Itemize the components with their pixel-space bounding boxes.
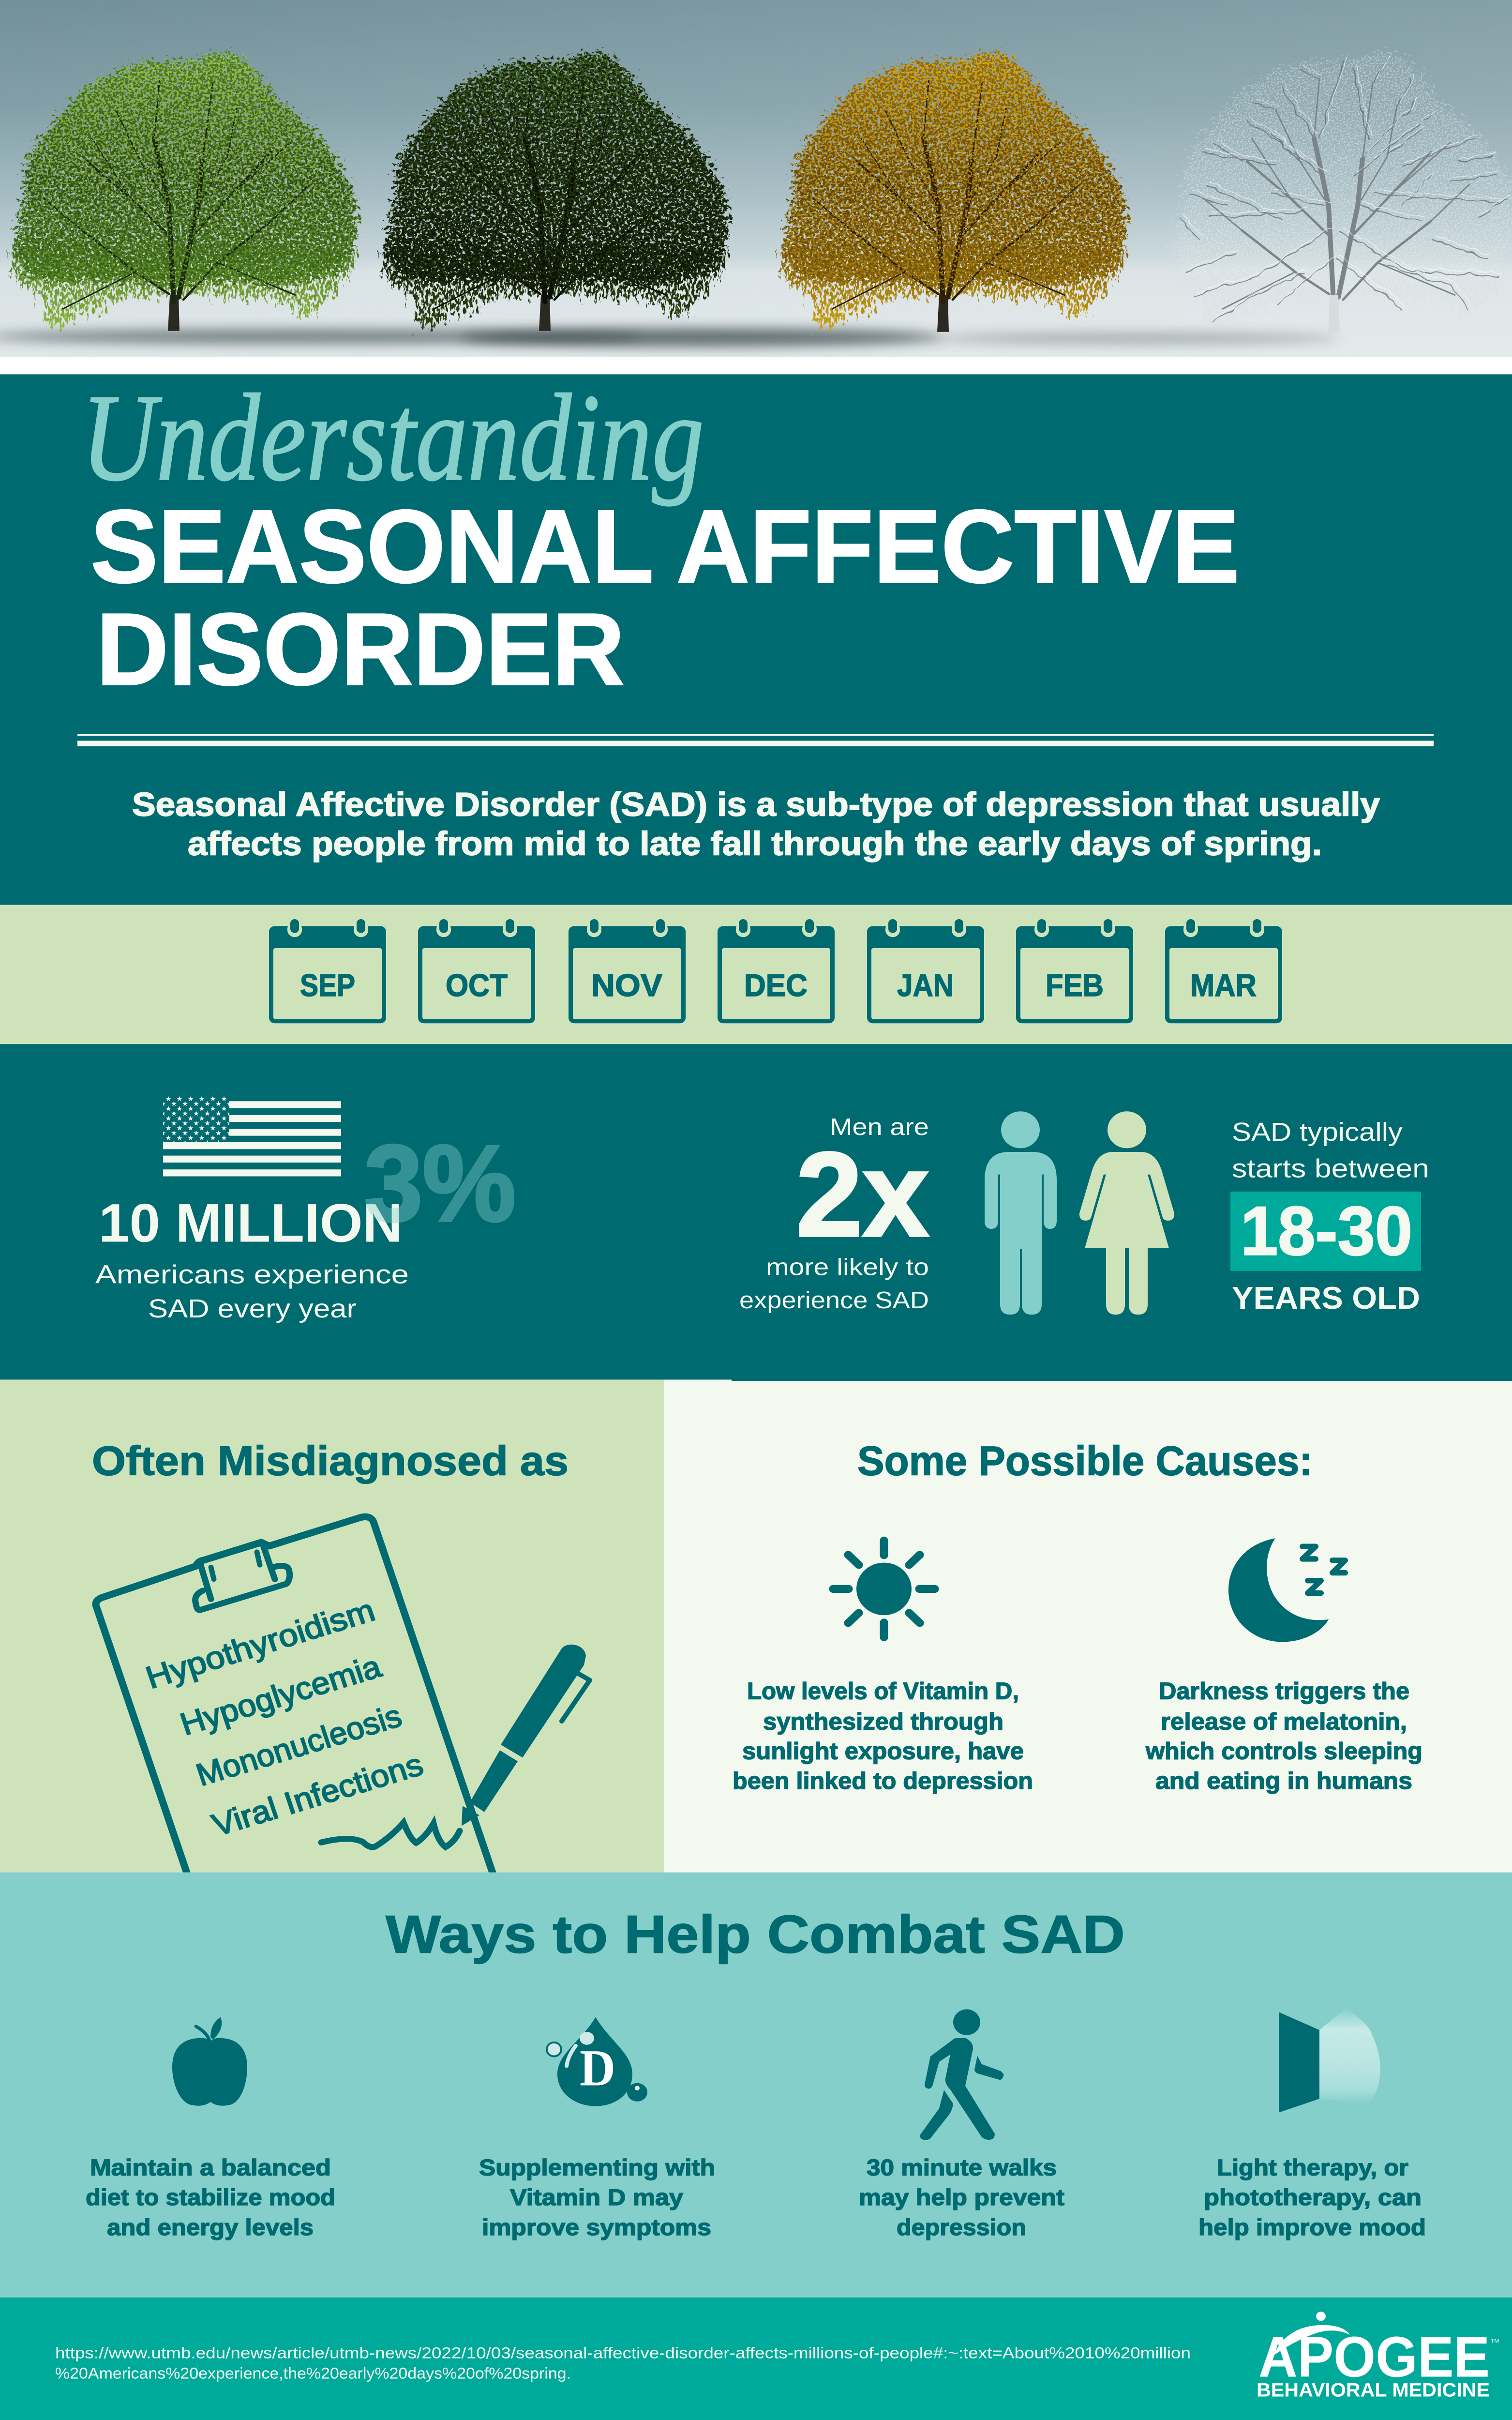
logo: Apogee Behavioral Medicine: APOGEE	[1258, 2325, 1490, 2389]
icon: sun	[833, 1541, 935, 1637]
text: vitamin D cause: been linked to depression	[733, 1767, 1033, 1794]
text: walks: 30 minute walks	[867, 2155, 1057, 2180]
icon: apple	[172, 2017, 247, 2106]
text: darkness cause: Darkness triggers the	[1159, 1678, 1409, 1704]
icon: vitamin D drop: D	[580, 2040, 615, 2097]
tree: spring green	[11, 52, 357, 333]
calendar: OCT: OCT	[446, 968, 508, 1003]
text: SAD typically starts: SAD typically	[1232, 1117, 1403, 1147]
text: vitamin D supplement	[479, 2155, 715, 2240]
tree: autumn gold	[780, 52, 1126, 333]
calendar: MAR	[1165, 919, 1282, 1023]
tree: summer dark green	[382, 52, 728, 333]
calendar: DEC	[718, 919, 835, 1023]
text: diagnoses list: Hypoglycemia	[176, 1649, 386, 1742]
text: men are 2x more likely	[739, 1113, 929, 1314]
panel: footer	[0, 2298, 1512, 2420]
calendar: NOV: NOV	[591, 968, 662, 1003]
calendar: JAN: JAN	[897, 968, 954, 1003]
calendar: NOV	[569, 919, 686, 1023]
text: Americans experience SAD	[95, 1260, 409, 1323]
icon: signature squiggle	[321, 1823, 460, 1847]
text: darkness cause: which controls sleeping	[1145, 1737, 1422, 1764]
text: men are 2x more likely: Men are	[830, 1113, 929, 1140]
text: walks: depression	[897, 2215, 1026, 2240]
text: walks: may help prevent	[859, 2185, 1064, 2210]
script word: Understanding: Understanding	[81, 369, 704, 507]
text: men are 2x more likely: 2x	[796, 1127, 929, 1261]
text: light therapy: Light therapy, or	[1217, 2155, 1408, 2180]
icon: man	[985, 1111, 1057, 1315]
text: SAD typically starts	[1232, 1117, 1429, 1183]
text: men are 2x more likely: more likely to	[766, 1253, 929, 1280]
heading line 2: DISORDER	[96, 592, 625, 706]
text: vitamin D supplement: improve symptoms	[482, 2215, 711, 2240]
icon: walking person	[920, 2009, 1003, 2140]
text: vitamin D cause: Low levels of Vitamin D,	[747, 1678, 1019, 1704]
stat: 10 million: 10 MILLION	[99, 1193, 403, 1254]
icon: woman	[1079, 1111, 1174, 1315]
text: source URL	[55, 2344, 1191, 2382]
icon: pen	[462, 1645, 590, 1826]
heading: Ways to Help Combat SAD	[386, 1905, 1125, 1965]
text: light therapy: help improve mood	[1198, 2215, 1426, 2240]
panel: often misdiagnosed as	[0, 1379, 664, 1878]
text: darkness cause: release of melatonin,	[1161, 1708, 1407, 1735]
text: Americans experience SAD: SAD every year	[148, 1294, 357, 1323]
callout: 18-30: 18-30	[1241, 1193, 1412, 1270]
calendar: SEP: SEP	[300, 968, 355, 1003]
calendar: FEB: FEB	[1046, 968, 1104, 1003]
text: diagnoses list: Viral Infections	[208, 1747, 427, 1843]
photo: four seasonal trees	[0, 0, 1512, 357]
title	[81, 369, 1240, 706]
intro text: Seasonal Affective Disorder (SAD) is a sub-type of depression that usually	[132, 786, 1380, 823]
text: light therapy	[1198, 2155, 1426, 2240]
text: vitamin D supplement: Vitamin D may	[510, 2185, 683, 2210]
text: vitamin D cause: synthesized through	[763, 1708, 1003, 1735]
panel: ways to help combat SAD	[0, 1873, 1512, 2298]
text: balanced diet: Maintain a balanced	[90, 2155, 331, 2180]
logo: Apogee Behavioral Medicine	[1257, 2312, 1499, 2401]
icon: US flag	[163, 1096, 341, 1176]
logo: Apogee Behavioral Medicine: TM	[1491, 2338, 1499, 2344]
text: diagnoses list: Hypothyroidism	[141, 1593, 379, 1695]
logo: Apogee Behavioral Medicine: BEHAVIORAL MEDICINE	[1257, 2379, 1490, 2401]
calendar: OCT	[418, 919, 535, 1023]
calendar: MAR: MAR	[1190, 968, 1257, 1003]
calendar: DEC: DEC	[744, 968, 808, 1003]
heading: Often Misdiagnosed as	[92, 1437, 569, 1484]
text: source URL: %20Americans%20experience,the%20early%20days%20of%20spring.	[55, 2365, 571, 2382]
calendar: FEB	[1016, 919, 1133, 1023]
text: darkness cause	[1145, 1678, 1422, 1794]
icon: light therapy lamp	[1279, 2009, 1380, 2113]
text: walks	[859, 2155, 1064, 2240]
calendar: SEP	[269, 919, 386, 1023]
text: vitamin D cause	[733, 1678, 1033, 1794]
text: SAD typically starts: starts between	[1232, 1154, 1429, 1183]
text: vitamin D supplement: Supplementing with	[479, 2155, 715, 2180]
text: Americans experience SAD: Americans experience	[95, 1260, 409, 1289]
text: years old: YEARS OLD	[1232, 1281, 1420, 1316]
text: men are 2x more likely: experience SAD	[739, 1286, 929, 1314]
panel: months calendar band	[0, 905, 1512, 1044]
calendar: JAN	[867, 919, 984, 1023]
icon: moon with z's	[1228, 1538, 1345, 1642]
intro text	[132, 786, 1380, 862]
icon: vitamin D drop	[547, 2017, 647, 2106]
heading line 1: SEASONAL AFFECTIVE	[90, 488, 1240, 605]
icon: clipboard	[96, 1517, 494, 1878]
stat: 3 percent: 3%	[364, 1122, 516, 1244]
tree: winter bare	[1170, 52, 1512, 333]
text: light therapy: phototherapy, can	[1204, 2185, 1422, 2210]
text: balanced diet: diet to stabilize mood	[86, 2185, 335, 2210]
panel: possible causes	[664, 1379, 1512, 1873]
text: diagnoses list: Mononucleosis	[192, 1698, 406, 1793]
text: darkness cause: and eating in humans	[1155, 1767, 1412, 1794]
intro text: affects people from mid to late fall through the early days of spring.	[188, 825, 1322, 862]
text: balanced diet: and energy levels	[107, 2215, 314, 2240]
text: diagnoses list	[141, 1593, 427, 1843]
text: source URL: https://www.utmb.edu/news/article/utmb-news/2022/10/03/seasonal-affective-disorder-affects-millions-of-people#:~:text=About%2010%20million	[55, 2344, 1191, 2362]
text: balanced diet	[86, 2155, 335, 2240]
panel: statistics	[0, 1044, 1512, 1381]
text: vitamin D cause: sunlight exposure, have	[742, 1737, 1024, 1764]
heading: Some Possible Causes:	[857, 1437, 1313, 1484]
